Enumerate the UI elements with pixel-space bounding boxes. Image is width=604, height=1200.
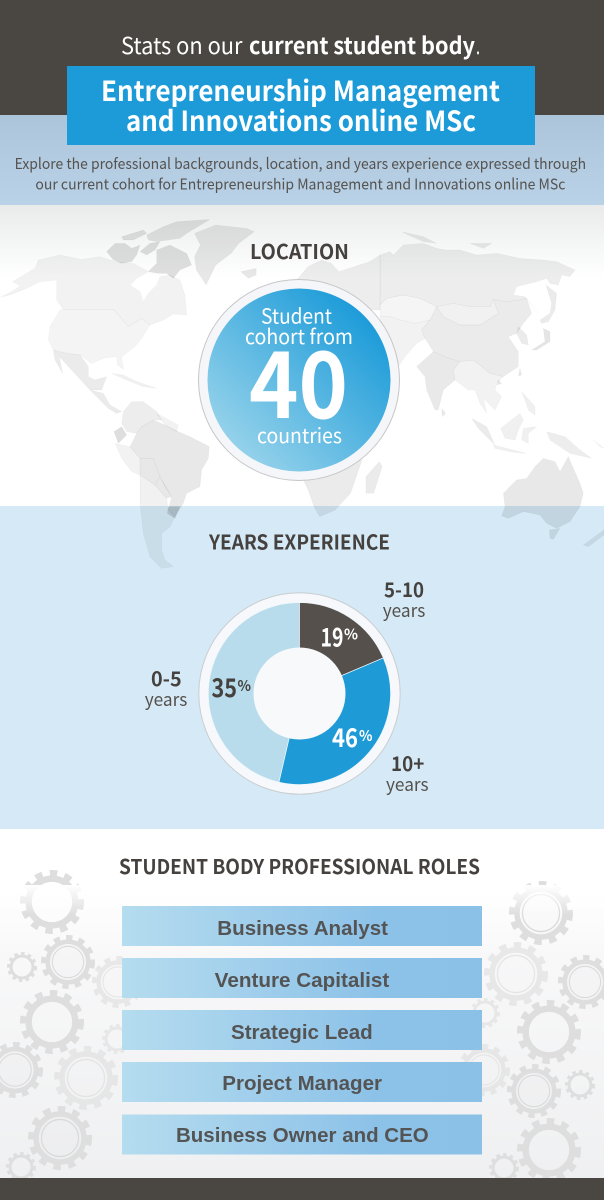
stat circle: 40 countries: 40 [249,312,348,445]
stat circle: 40 countries: cohort from [245,320,353,350]
role bar: business analyst: Business Analyst [217,917,388,940]
value: 19%: % [344,624,358,644]
slice: 0-5 years [208,602,300,782]
donut chart [199,593,400,794]
label: 0-5 years [145,663,187,712]
label: 0-5 years: years [145,686,187,712]
label: 10+ years: 10+ [391,748,424,777]
stat circle: 40 countries: countries [257,419,342,449]
heading: stats on our current student body: current student body [249,27,475,61]
stat circle: 40 countries: Student [261,300,332,330]
label: 5-10 years: 5-10 [384,574,424,603]
value: 46%: % [359,725,372,746]
role bar: venture capitalist [122,958,482,998]
role bar: business owner and CEO [122,1114,482,1154]
Southeast Asia and Oceania [472,392,604,547]
gear pattern: left [0,873,141,1180]
stat circle: 40 countries [198,280,400,480]
world map [0,219,604,568]
label: 0-5 years: 0-5 [151,663,182,692]
role bar: strategic lead [122,1010,482,1050]
heading: stats on our current student body [121,27,480,61]
title box: Entrepreneurship Management [101,70,500,110]
North America [0,219,210,390]
role bar: business owner and CEO: Business Owner and CEO [176,1124,429,1147]
title box: and Innovations online MSc [126,100,476,140]
role bar: strategic lead: Strategic Lead [231,1021,373,1044]
intro text: our current cohort for Entrepreneurship Management and Innovations online MSc [35,174,566,194]
donut hole [254,648,346,740]
years experience panel background [0,506,604,829]
label: 5-10 years: years [383,597,425,623]
role bar: business analyst [122,906,482,946]
value: 19%: 19 [320,618,344,654]
slice: 10+ years [279,658,391,785]
role bar: venture capitalist: Venture Capitalist [215,969,389,992]
gear pattern: right [461,884,604,1182]
label: 10+ years [386,748,429,797]
intro text [15,153,586,194]
slice: 5-10 years [300,602,383,694]
heading: student body professional roles: STUDENT BODY PROFESSIONAL ROLES [119,850,480,880]
heading: location: LOCATION [250,235,349,265]
value: 46%: 46 [332,718,358,755]
value: 35%: % [238,675,251,696]
label: 10+ years: years [386,771,429,797]
header band [0,0,604,115]
role bar: project manager [122,1062,482,1102]
Asia [380,232,575,417]
roles panel background [0,829,604,1178]
subtitle band [0,115,604,205]
title box [67,66,535,145]
footer band [0,1178,604,1200]
role bar: project manager: Project Manager [222,1072,382,1095]
label: 5-10 years [383,574,425,623]
value: 35%: 35 [212,668,237,705]
heading: stats on our current student body: Stats on our [121,27,243,61]
heading: years experience: YEARS EXPERIENCE [208,526,390,556]
location panel background [0,205,604,506]
South America [90,390,209,568]
Greenland, Iceland, Scandinavia, Africa [195,225,382,517]
heading: stats on our current student body: . [476,27,480,61]
